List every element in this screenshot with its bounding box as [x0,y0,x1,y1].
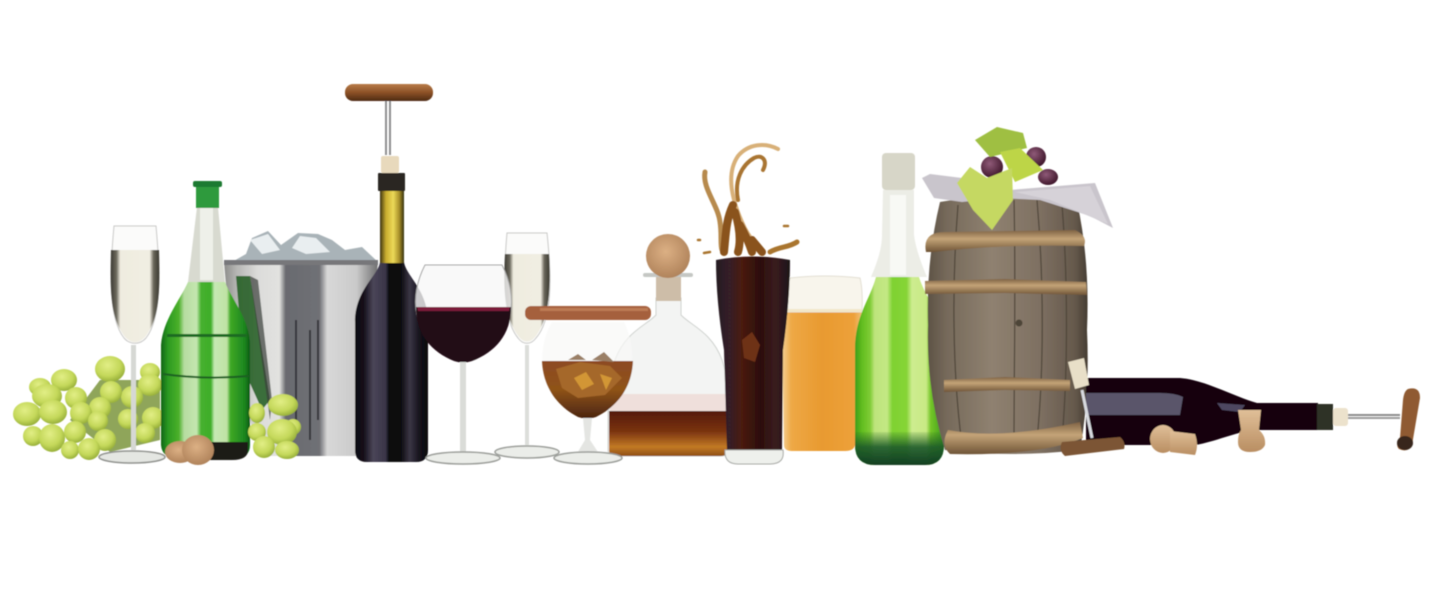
barrel [925,196,1088,454]
cigar [525,306,651,320]
cork left [165,435,214,465]
corkscrew at lying bottle [1333,388,1420,450]
green bottle right [855,153,944,465]
champagne flute left [99,226,165,463]
red wine bottle [355,173,428,462]
green bottle left [161,181,250,460]
cola glass [716,256,790,464]
brandy snifter [542,322,633,464]
corkscrew and cork by barrel [1061,358,1124,456]
napkin [922,174,1113,228]
grapes right of bucket [248,394,301,459]
lying wine bottle [1086,378,1333,445]
cola splash [698,145,797,253]
red wine glass [416,265,511,464]
grapes left [13,356,164,460]
ice bucket [224,231,378,456]
corkscrew in red wine bottle [345,84,433,173]
decanter [608,234,729,456]
beer glass [782,276,862,451]
corks on the right [1150,410,1265,455]
grape leaves and red grapes [957,127,1058,230]
champagne flute right [495,233,559,458]
